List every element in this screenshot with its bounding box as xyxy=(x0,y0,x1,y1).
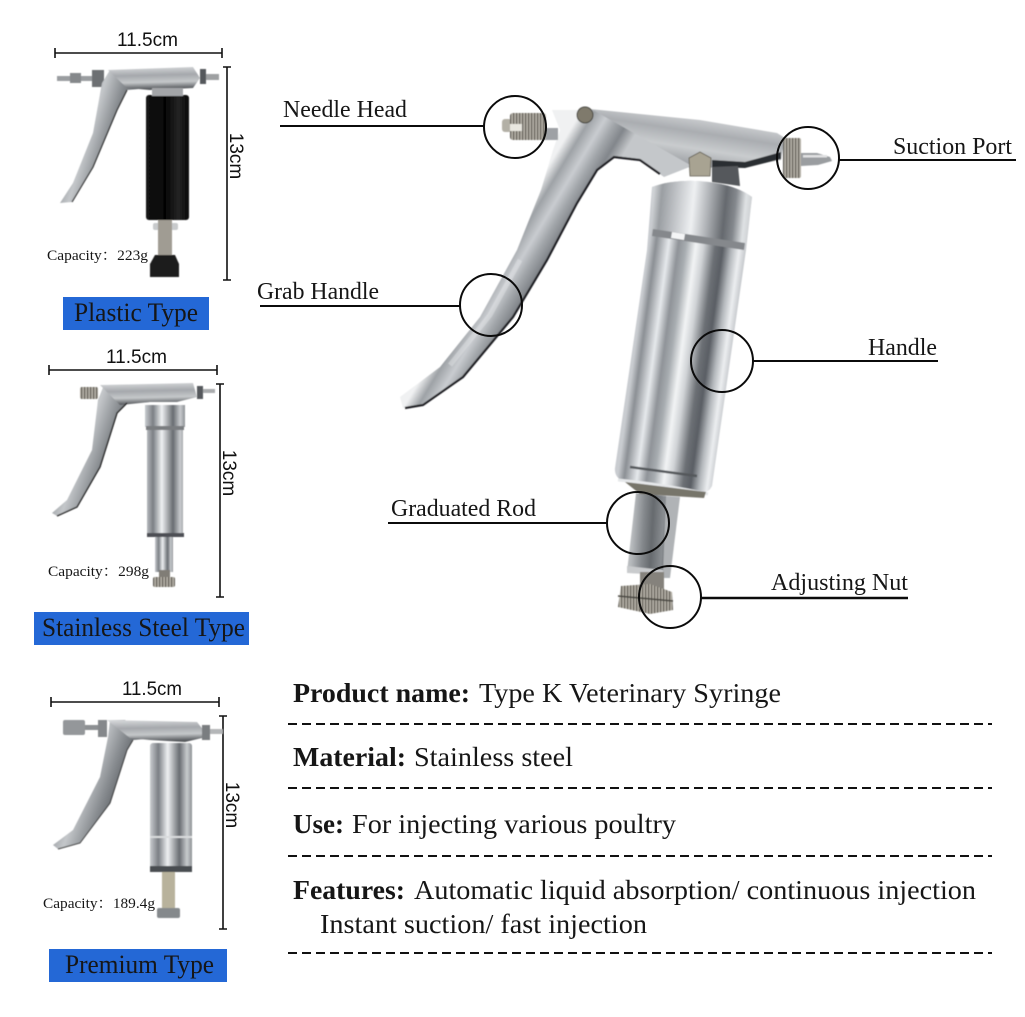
pivot screw xyxy=(577,107,593,123)
suction port connector xyxy=(783,138,832,178)
spec: material: Stainless steel xyxy=(414,742,573,772)
callout: suction port: Suction Port xyxy=(893,134,1012,160)
spec: product name xyxy=(293,678,781,708)
premium syringe xyxy=(53,720,223,918)
width dimension xyxy=(51,679,219,707)
panel: premium type xyxy=(43,679,242,982)
width dimension: 11.5cm xyxy=(106,347,167,368)
spec: product name: Product name: xyxy=(293,678,470,708)
height dimension: 13cm xyxy=(218,450,239,496)
height dimension xyxy=(223,67,246,280)
needle head connector xyxy=(502,113,558,140)
spec: material: Material: xyxy=(293,742,406,772)
callout: suction port xyxy=(777,127,1016,189)
callout: needle head xyxy=(280,96,546,158)
spec: material xyxy=(293,742,573,772)
spec: features: Features: xyxy=(293,875,405,905)
width dimension: 11.5cm xyxy=(117,30,178,51)
specification list xyxy=(288,678,992,953)
callout: graduated rod xyxy=(388,492,669,554)
height dimension: 13cm xyxy=(225,133,246,179)
type label: Stainless Steel Type xyxy=(42,613,245,642)
stainless syringe xyxy=(52,383,215,587)
spec: features: Automatic liquid absorption/ continuous injection xyxy=(414,875,977,905)
type label: Premium Type xyxy=(65,950,214,979)
width dimension: 11.5cm xyxy=(122,679,182,700)
panel: plastic type xyxy=(47,30,246,330)
neck under bar xyxy=(712,166,740,186)
height dimension xyxy=(216,384,239,597)
height dimension xyxy=(219,716,242,929)
adjusting nut xyxy=(618,572,673,614)
top body bar xyxy=(590,109,785,168)
callout: adjusting nut xyxy=(639,566,908,628)
height dimension: 13cm xyxy=(221,782,242,828)
callout: handle: Handle xyxy=(868,335,937,361)
plastic syringe xyxy=(57,67,219,277)
callout: graduated rod: Graduated Rod xyxy=(391,496,536,522)
panel: stainless steel type xyxy=(34,347,249,645)
width dimension xyxy=(55,30,222,58)
spec: product name: Type K Veterinary Syringe xyxy=(479,678,781,708)
spec: features xyxy=(293,875,977,939)
callout: handle xyxy=(691,330,938,392)
type label: Plastic Type xyxy=(74,298,198,327)
width dimension xyxy=(49,347,217,375)
piston bolt xyxy=(689,152,711,176)
callout: grab handle: Grab Handle xyxy=(257,279,379,305)
callout: grab handle xyxy=(257,274,522,336)
callout: needle head: Needle Head xyxy=(283,97,407,123)
graduated rod xyxy=(625,482,706,578)
capacity: Capacity：189.4g xyxy=(43,896,155,912)
spec: features: Instant suction/ fast injection xyxy=(320,909,648,939)
capacity: Capacity：298g xyxy=(48,564,149,580)
callout: adjusting nut: Adjusting Nut xyxy=(771,570,908,596)
grab handle lever xyxy=(400,110,692,408)
capacity: Capacity：223g xyxy=(47,248,148,264)
cylinder handle xyxy=(615,181,752,494)
spec: use: For injecting various poultry xyxy=(352,809,677,839)
spec: use: Use: xyxy=(293,809,344,839)
main syringe illustration xyxy=(400,107,832,614)
